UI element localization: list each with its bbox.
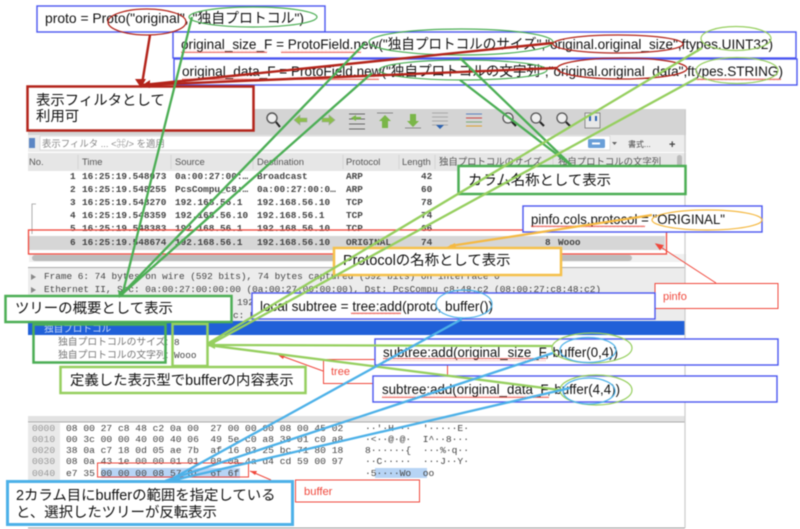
packet list rows: 66 bbox=[421, 223, 433, 234]
label: tree: tree bbox=[331, 366, 350, 378]
arrow: buffer to bytes bbox=[250, 471, 271, 480]
packet list rows: 0a:00:27:00:0… bbox=[257, 184, 336, 195]
packet list rows: 16:25:19.548674 bbox=[82, 237, 167, 248]
packet list rows: 3 bbox=[70, 197, 76, 208]
code box: original_size_F: original_size_F = ProtoField.new("独自プロトコルのサイズ","original.original_size",ftypes.UINT32) bbox=[181, 36, 773, 52]
highlight: tree field names bbox=[34, 324, 166, 362]
packet list rows: 16:25:19.548255 bbox=[82, 184, 167, 195]
arrow: pinfo to row bbox=[656, 244, 716, 283]
label: buffer: buffer bbox=[304, 486, 333, 498]
arrow: tree to fields bbox=[278, 355, 323, 371]
callout: Protocolの名称として表示: Protocolの名称として表示 bbox=[343, 252, 510, 269]
packet list rows: 192.168.56.1 bbox=[175, 237, 243, 248]
packet list rows: 192.168.56.1 bbox=[257, 210, 325, 221]
arrow: orange to protocol name bbox=[447, 215, 652, 248]
code box: subtree add size: subtree:add(original_size_F, buffer(0,4)) bbox=[383, 344, 618, 360]
packet list rows: 0a:00:27:00:… bbox=[175, 171, 249, 182]
packet details pane bbox=[28, 267, 685, 361]
callout: ツリーの概要として表示 bbox=[6, 296, 232, 322]
packet list rows: 5 bbox=[70, 223, 76, 234]
callout: 2カラム目にbufferの範囲を指定: と、選択したツリーが反転表示 bbox=[16, 504, 217, 521]
packet list rows: 42 bbox=[421, 171, 433, 182]
packet bytes pane: 0040 bbox=[32, 468, 55, 479]
packet bytes pane: 08 00 27 c8 48 c2 0a 00 27 00 00 00 08 00 45 02 bbox=[66, 423, 343, 434]
panel: Wireshark window screenshot bbox=[28, 109, 686, 529]
packet list rows: TCP bbox=[346, 223, 363, 234]
packet list rows: 16:25:19.548359 bbox=[82, 210, 167, 221]
callout: 表示フィルタとして利用可: 利用可 bbox=[36, 108, 79, 125]
packet list rows: 60 bbox=[421, 184, 433, 195]
filter bar bbox=[28, 135, 686, 152]
packet list rows: 74 bbox=[421, 237, 433, 248]
packet bytes pane: 0020 bbox=[32, 445, 55, 456]
packet details pane: Wooo bbox=[174, 350, 197, 361]
packet list header: 独自プロトコルのサイズ bbox=[439, 156, 542, 167]
packet details pane: 192 bbox=[237, 297, 254, 308]
packet list rows: ARP bbox=[346, 184, 363, 195]
packet bytes pane: 00 3c 00 00 40 00 40 06 49 5e c0 a8 38 01 c0 a8 bbox=[66, 434, 343, 445]
filter bar: 表示フィルタ ... <⌘/> を適用 bbox=[42, 138, 165, 149]
packet list rows: 8 bbox=[545, 237, 551, 248]
packet details pane: Frame 6: 74 bytes on wire (592 bits), 74 bytes captured (592 bits) on interface 0 bbox=[44, 271, 500, 282]
packet list header: Length bbox=[402, 156, 431, 167]
callout: 表示フィルタとして利用可 bbox=[28, 86, 254, 130]
ellipses: column names (green) bbox=[189, 7, 553, 80]
packet list rows: 16:25:19.548383 bbox=[82, 223, 167, 234]
callout: カラム名称として表示 bbox=[458, 166, 686, 194]
packet bytes pane: ··'·H··· '·····E· bbox=[365, 423, 469, 434]
packet list rows: ORIGINAL bbox=[346, 237, 391, 248]
code box: pinfo.cols.protocol bbox=[523, 206, 762, 232]
packet list header bbox=[28, 153, 686, 171]
code box: local subtree: local subtree = tree:add(proto, buffer()) bbox=[260, 298, 493, 314]
packet list rows: 1 bbox=[70, 171, 76, 182]
packet list rows: 4 bbox=[70, 210, 76, 221]
packet list rows: 6 bbox=[70, 237, 76, 248]
code box: original_data_F bbox=[174, 59, 797, 85]
code box: pinfo.cols.protocol: pinfo.cols.protocol = "ORIGINAL" bbox=[531, 211, 725, 227]
ellipse: ORIGINAL value (orange) bbox=[652, 210, 762, 230]
packet bytes pane: 0010 bbox=[32, 434, 55, 445]
toolbar bbox=[28, 109, 686, 135]
packet list header: Source bbox=[175, 156, 205, 167]
callout: red highlight around packet row 6 bbox=[28, 230, 666, 254]
code box: original_size_F bbox=[173, 32, 796, 58]
label: pinfo: pinfo bbox=[663, 291, 687, 303]
ellipses: buffer ranges (blue) bbox=[436, 290, 616, 404]
packet list rows: Broadcast bbox=[257, 171, 308, 182]
callout: ツリーの概要として表示: ツリーの概要として表示 bbox=[15, 300, 173, 317]
packet list rows: 192.168.56.1 bbox=[175, 223, 243, 234]
callout: 2カラム目にbufferの範囲を指定: 2カラム目にbufferの範囲を指定している bbox=[16, 486, 276, 504]
packet bytes pane: e7 35 00 00 00 08 57 6f 6f 6f bbox=[66, 468, 240, 479]
code box: original_data_F: original_data_F = ProtoField.new("独自プロトコルの文字列","original.original_data",ftypes.STRING) bbox=[182, 63, 783, 79]
arrows: dark red to display filter callout bbox=[135, 35, 557, 88]
filter bar: 書式... bbox=[628, 139, 651, 149]
packet list rows: 16:25:19.548073 bbox=[82, 171, 167, 182]
packet list rows: ARP bbox=[346, 171, 363, 182]
packet details pane: 独自プロトコル bbox=[44, 323, 112, 335]
ellipses: field types (light green) bbox=[552, 26, 778, 405]
packet list rows: 78 bbox=[421, 197, 433, 208]
packet list header: Destination bbox=[257, 156, 304, 167]
callout: 定義した表示型でbufferの内容表示 bbox=[60, 367, 306, 393]
packet list header: 独自プロトコルの文字列 bbox=[558, 156, 661, 167]
packet details pane: Ethernet II, Src: 0a:00:27:00:00:00 (0a:00:27:00:00:00), Dst: PcsCompu_c8:48:c2 (08:00:27:c8:48:c2) bbox=[44, 284, 601, 295]
packet list rows: 74 bbox=[421, 210, 433, 221]
packet details pane: 8 bbox=[174, 337, 180, 348]
label: tree bbox=[324, 360, 448, 384]
arrows: blue from buffer to reverse display bbox=[165, 319, 570, 481]
callout: 定義した表示型でbufferの内容表示: 定義した表示型でbufferの内容表示 bbox=[70, 372, 294, 389]
packet list rows bbox=[29, 171, 686, 262]
filter bar: + bbox=[669, 139, 675, 151]
packet list header: No. bbox=[29, 156, 44, 167]
packet list rows: 192.168.56.10 bbox=[175, 210, 249, 221]
highlight: tree field values bbox=[172, 324, 208, 366]
packet list rows: 192.168.56.10 bbox=[257, 197, 331, 208]
code box: subtree add data bbox=[373, 376, 777, 402]
packet list rows: TCP bbox=[346, 210, 363, 221]
packet list rows: 192.168.56.1 bbox=[175, 197, 243, 208]
packet details pane: c: Po bbox=[233, 310, 262, 321]
packet bytes pane: ··C····· ···J··Y· bbox=[365, 456, 469, 467]
packet list rows: 2 bbox=[70, 184, 76, 195]
code box: subtree add data: subtree:add(original_data_F, buffer(4,4)) bbox=[382, 381, 620, 397]
ellipses: filter names (red) bbox=[108, 9, 687, 79]
arrows: light green to displayed values bbox=[207, 48, 702, 390]
packet bytes pane: 0000 bbox=[32, 423, 55, 434]
packet list rows: 192.168.56.10 bbox=[257, 223, 331, 234]
callout: カラム名称として表示: カラム名称として表示 bbox=[468, 172, 611, 189]
callout: 2カラム目にbufferの範囲を指定 bbox=[8, 482, 292, 524]
packet details pane: 独自プロトコルのサイズ: bbox=[58, 335, 168, 348]
callout: Protocolの名称として表示 bbox=[334, 248, 561, 275]
packet bytes pane: 0030 bbox=[32, 456, 55, 467]
packet list header: Protocol bbox=[346, 156, 380, 167]
packet bytes pane: 08 0a 43 1e 00 00 01 01 08 0a 4a d4 cd 59 00 97 bbox=[66, 456, 343, 467]
packet list rows: Wooo bbox=[558, 237, 581, 248]
packet list header: Time bbox=[82, 156, 102, 167]
packet list rows: PcsCompu_c8:… bbox=[175, 184, 249, 195]
packet bytes pane: 8······{ ···%·q·· bbox=[365, 445, 469, 456]
packet bytes pane bbox=[28, 416, 685, 528]
packet details pane: 独自プロトコルの文字列: bbox=[58, 348, 168, 361]
code box: proto: proto = Proto("original", "独自プロトコル") bbox=[45, 10, 304, 26]
packet list rows: 192.168.56.10 bbox=[257, 237, 331, 248]
code box: subtree add size bbox=[375, 339, 778, 365]
packet list rows: 16:25:19.548270 bbox=[82, 197, 167, 208]
label: buffer bbox=[296, 480, 420, 502]
callout: 表示フィルタとして利用可: 表示フィルタとして bbox=[36, 92, 165, 109]
packet list rows: TCP bbox=[346, 197, 363, 208]
code box: proto bbox=[37, 6, 325, 32]
packet bytes pane: ·5····Wo oo bbox=[365, 468, 435, 479]
packet bytes pane: 38 0a c7 18 0d 05 ae 7b af 16 03 25 bc 71 80 18 bbox=[66, 445, 343, 456]
callout: red highlight around buffer bytes bbox=[98, 463, 248, 477]
code box: local subtree bbox=[252, 293, 655, 319]
packet bytes pane: ·<··@·@· I^··8··· bbox=[365, 434, 469, 445]
label: pinfo bbox=[655, 284, 778, 308]
arrows: green to tree summary and column name bbox=[118, 17, 572, 298]
